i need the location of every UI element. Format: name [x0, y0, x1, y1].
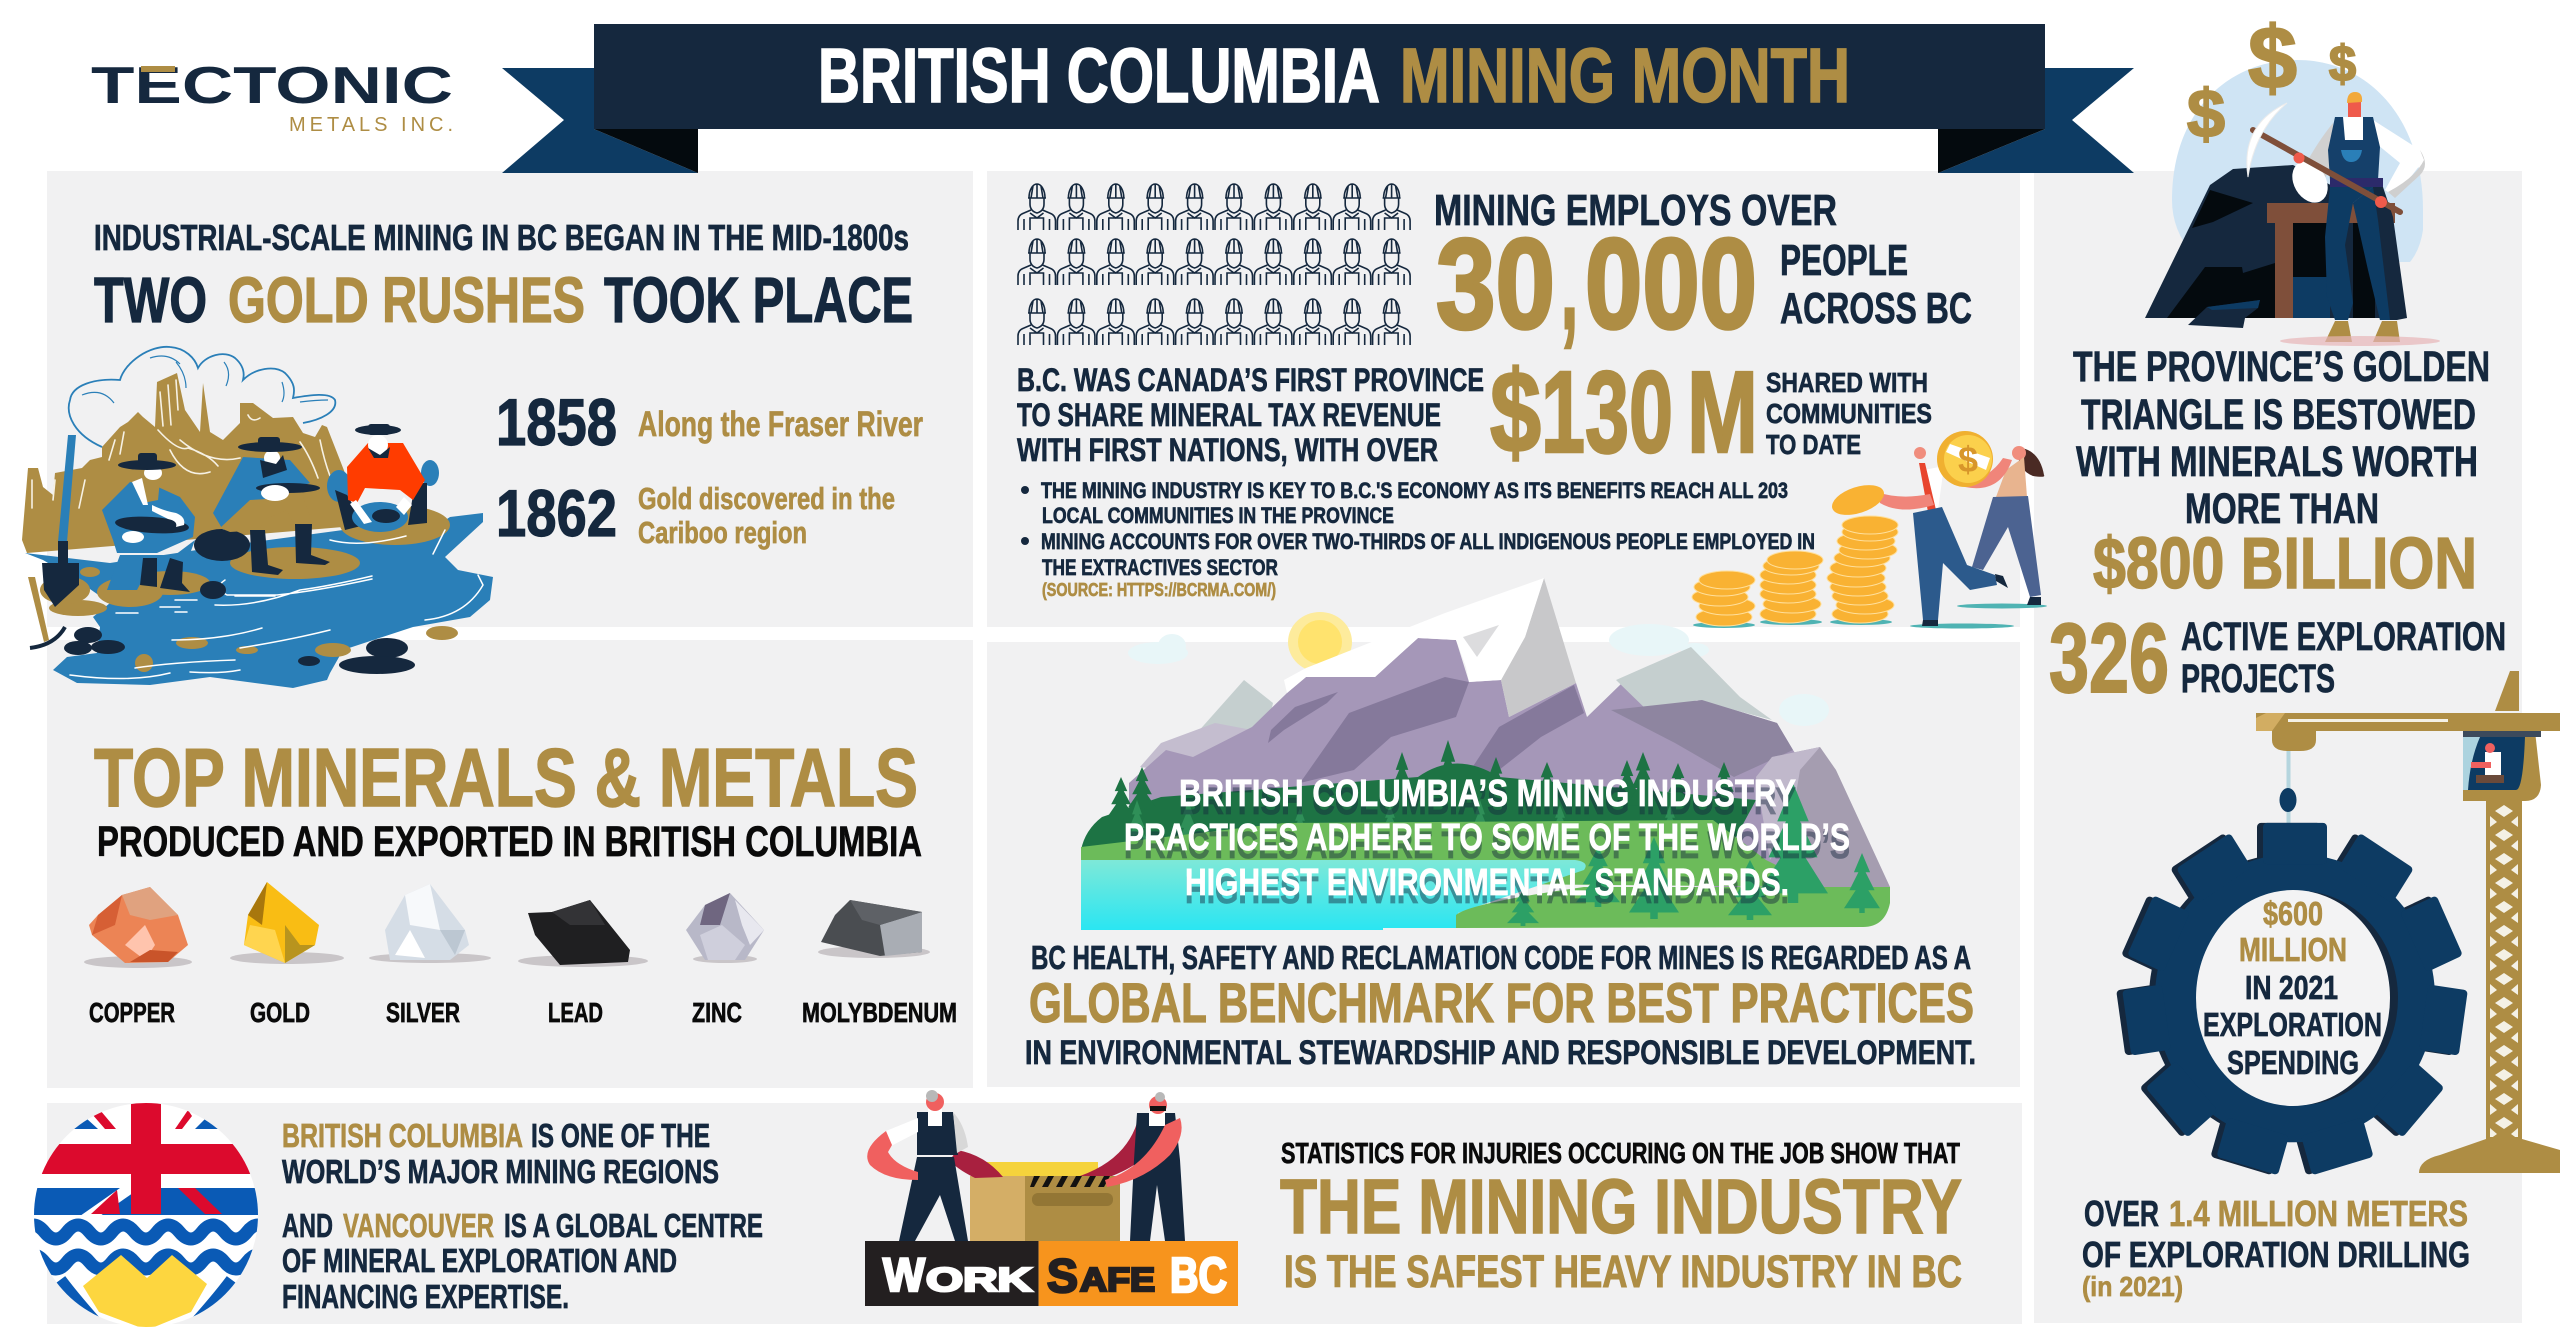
logo: Tectonic Metals Inc.	[91, 57, 453, 136]
panel: gold rushes heading: TOOK PLACE	[604, 264, 913, 336]
environment statement: HIGHEST ENVIRONMENTAL STANDARDS.	[1185, 870, 1789, 912]
exploration spending text: $600	[2263, 895, 2323, 932]
box	[970, 1162, 1120, 1241]
drilling stat: 1.4 MILLION METERS	[2169, 1193, 2468, 1234]
employment stat: ACROSS BC	[1780, 284, 1972, 333]
exploration spending text: EXPLORATION	[2203, 1006, 2382, 1043]
middle miner	[213, 437, 330, 575]
crane base	[2419, 1139, 2560, 1173]
logo: Tectonic Metals Inc.: METALS INC.	[289, 114, 453, 136]
rush dates	[496, 385, 923, 550]
icon: British Columbia flag	[34, 1103, 258, 1327]
British Columbia text: OF MINERAL EXPLORATION AND	[282, 1242, 677, 1279]
held coins	[1828, 431, 1993, 521]
bullet list: THE EXTRACTIVES SECTOR	[1042, 555, 1278, 580]
gear body	[2122, 823, 2468, 1175]
foreground trees	[1507, 783, 1880, 926]
employment stat	[1434, 186, 1972, 356]
green meadow	[1081, 820, 1820, 887]
tax revenue statement: B.C. WAS CANADA’S FIRST PROVINCE	[1017, 362, 1484, 398]
mineral labels: GOLD	[250, 997, 310, 1028]
top minerals heading: PRODUCED AND EXPORTED IN BRITISH COLUMBIA	[97, 818, 922, 866]
WorkSafe BC logo: S	[1047, 1249, 1078, 1302]
global benchmark text: IN ENVIRONMENTAL STEWARDSHIP AND RESPONSIBLE DEVELOPMENT.	[1025, 1034, 1976, 1072]
teal shadows	[1693, 604, 2047, 628]
tax revenue statement: 130	[1541, 347, 1673, 477]
mineral labels: ZINC	[692, 997, 742, 1028]
panel: gold rushes heading	[94, 217, 913, 336]
pick	[28, 577, 65, 648]
safety statement: STATISTICS FOR INJURIES OCCURING ON THE JOB SHOW THAT	[1281, 1138, 1960, 1170]
WorkSafe BC logo: W	[883, 1248, 926, 1301]
left worker	[867, 1090, 1003, 1241]
mine mound	[2145, 165, 2407, 318]
British Columbia text: BRITISH COLUMBIA	[282, 1117, 523, 1154]
environment statement: PRACTICES ADHERE TO SOME OF THE WORLD’S	[1124, 825, 1850, 867]
right worker	[1080, 1092, 1185, 1241]
title text: BRITISH COLUMBIA	[818, 33, 1380, 119]
employment stat: 30	[1436, 213, 1555, 356]
purple mountains	[1129, 638, 1890, 903]
mineral: lead	[518, 900, 648, 967]
global benchmark text: GLOBAL BENCHMARK FOR BEST PRACTICES	[1029, 971, 1974, 1034]
environment statement: BRITISH COLUMBIA’S MINING INDUSTRY	[1179, 773, 1796, 815]
environment statement	[1124, 773, 1850, 912]
mineral: molybdenum	[818, 900, 930, 958]
British Columbia text: AND	[282, 1207, 333, 1244]
dollar signs: $	[2248, 8, 2297, 107]
man	[1877, 447, 2008, 626]
river	[25, 513, 493, 688]
shovel	[42, 435, 79, 607]
dark rocks	[64, 529, 415, 674]
mineral: silver	[369, 884, 491, 963]
clouds	[1128, 624, 1829, 726]
British Columbia text: IS ONE OF THE	[531, 1117, 710, 1154]
snow cap	[1501, 578, 1576, 717]
panel: gold rushes heading: TWO	[94, 264, 207, 336]
WorkSafe BC logo	[865, 1241, 1238, 1306]
mineral: zinc	[686, 893, 764, 963]
bullet list: (SOURCE: HTTPS://BCRMA.COM/)	[1042, 580, 1276, 600]
employment stat: MINING EMPLOYS OVER	[1434, 186, 1837, 235]
cloud outline	[69, 347, 335, 447]
crane tower	[2486, 801, 2522, 1139]
golden triangle text: MORE THAN	[2185, 485, 2379, 533]
rush dates: Gold discovered in the	[638, 481, 895, 516]
bullet list: LOCAL COMMUNITIES IN THE PROVINCE	[1042, 503, 1394, 528]
mineral: gold	[230, 882, 344, 964]
rush dates: Cariboo region	[638, 515, 807, 550]
mineral labels: LEAD	[548, 997, 603, 1028]
dollar signs: $	[2187, 76, 2225, 152]
tax revenue statement: TO SHARE MINERAL TAX REVENUE	[1017, 397, 1441, 433]
illustration: miner with pickaxe at mine	[2145, 8, 2440, 346]
British Columbia text: IS A GLOBAL CENTRE	[504, 1207, 763, 1244]
rush dates: 1858	[496, 385, 617, 459]
sun	[1288, 612, 1352, 672]
safety statement: IS THE SAFEST HEAVY INDUSTRY IN BC	[1284, 1246, 1962, 1297]
held coins: $	[1958, 439, 1978, 480]
environment statement: BRITISH COLUMBIA’S MINING INDUSTRY	[1179, 781, 1796, 823]
exploration spending text: MILLION	[2239, 931, 2347, 968]
tax revenue statement: WITH FIRST NATIONS, WITH OVER	[1017, 432, 1438, 468]
illustration: gold panners at river	[22, 347, 493, 688]
employment stat: 000	[1585, 213, 1757, 356]
employment stat: PEOPLE	[1780, 236, 1908, 285]
employment stat: ,	[1561, 213, 1578, 356]
illustration: mountain landscape	[1081, 578, 1890, 930]
mineral labels: MOLYBDENUM	[802, 997, 957, 1028]
woman	[1956, 446, 2044, 605]
exploration projects stat: PROJECTS	[2181, 657, 2335, 701]
British Columbia text: FINANCING EXPERTISE.	[282, 1278, 569, 1315]
illustration: workers lifting box	[867, 1090, 1185, 1241]
WorkSafe BC logo: ORK	[926, 1261, 1032, 1298]
title ribbon	[502, 24, 2134, 173]
wooden mine frame	[2267, 203, 2395, 318]
bullet list	[1021, 478, 1815, 600]
drilling stat: (in 2021)	[2082, 1271, 2183, 1302]
logo: Tectonic Metals Inc.: TECTONIC	[91, 57, 453, 115]
panel: gold rushes heading: GOLD RUSHES	[228, 264, 585, 336]
golden triangle text: $800 BILLION	[2093, 524, 2477, 604]
British Columbia text: WORLD’S MAJOR MINING REGIONS	[282, 1153, 719, 1190]
global benchmark text: BC HEALTH, SAFETY AND RECLAMATION CODE FOR MINES IS REGARDED AS A	[1031, 939, 1971, 976]
icon: gear	[2116, 823, 2468, 1175]
tax revenue statement: $	[1490, 347, 1541, 477]
drilling stat	[2082, 1193, 2470, 1302]
WorkSafe BC logo: BC	[1170, 1249, 1227, 1303]
environment statement: PRACTICES ADHERE TO SOME OF THE WORLD’S	[1124, 817, 1850, 859]
pale blue backdrop	[2172, 60, 2423, 262]
golden triangle text	[2073, 343, 2490, 604]
exploration projects stat	[2049, 603, 2506, 713]
distant grey peaks	[1188, 680, 1273, 760]
exploration spending text: IN 2021	[2245, 969, 2338, 1006]
mineral labels	[89, 997, 957, 1028]
safety statement	[1280, 1138, 1962, 1297]
British Columbia text: VANCOUVER	[343, 1207, 494, 1244]
river stones	[40, 505, 458, 672]
tax revenue statement	[1017, 347, 1932, 477]
crane cabin	[2463, 731, 2541, 801]
lake	[1081, 860, 1586, 930]
WorkSafe BC logo: AFE	[1080, 1261, 1155, 1298]
pickaxe	[2253, 130, 2400, 212]
drilling stat: OVER	[2084, 1193, 2159, 1234]
tax revenue statement: M	[1687, 347, 1758, 477]
miner	[2247, 92, 2440, 346]
tax revenue statement: TO DATE	[1766, 429, 1861, 460]
rush dates: 1862	[496, 476, 617, 550]
bullet list: MINING ACCOUNTS FOR OVER TWO-THIRDS OF ALL INDIGENOUS PEOPLE EMPLOYED IN	[1041, 529, 1815, 554]
tax revenue statement: COMMUNITIES	[1766, 398, 1932, 429]
bullet list: THE MINING INDUSTRY IS KEY TO B.C.'S ECONOMY AS ITS BENEFITS REACH ALL 203	[1041, 478, 1788, 503]
coin stacks	[1692, 516, 1898, 626]
forest background	[1081, 764, 1756, 850]
top minerals heading	[94, 731, 922, 866]
illustration: crane	[2256, 671, 2560, 1173]
rush dates: Along the Fraser River	[638, 405, 923, 444]
rocks right	[1756, 747, 1890, 903]
right meadow	[1456, 887, 1890, 928]
title ribbon: MINING MONTH	[1400, 33, 1850, 119]
British Columbia text	[282, 1117, 763, 1315]
panel: gold rushes heading: INDUSTRIAL-SCALE MINING IN BC BEGAN IN THE MID-1800s	[94, 217, 909, 258]
rock cliff	[22, 373, 345, 553]
mineral labels: COPPER	[89, 997, 175, 1028]
exploration spending text: SPENDING	[2227, 1044, 2359, 1081]
gear shadow	[2116, 823, 2462, 1175]
global benchmark text	[1025, 939, 1976, 1072]
mineral labels: SILVER	[386, 997, 460, 1028]
right miner	[327, 424, 439, 532]
exploration spending text	[2203, 895, 2382, 1081]
top minerals heading: TOP MINERALS & METALS	[94, 731, 918, 824]
mineral: copper	[84, 887, 192, 968]
left miner	[102, 453, 195, 592]
illustration: coin stacks and two people	[1692, 431, 2047, 628]
tax revenue statement: SHARED WITH	[1766, 367, 1928, 398]
safety statement: THE MINING INDUSTRY	[1280, 1164, 1962, 1250]
dollar signs	[2187, 8, 2356, 152]
dollar signs: $	[2329, 36, 2356, 92]
exploration projects stat: 326	[2049, 603, 2169, 713]
environment statement: HIGHEST ENVIRONMENTAL STANDARDS.	[1185, 862, 1789, 904]
worker icon grid	[1018, 184, 1410, 345]
